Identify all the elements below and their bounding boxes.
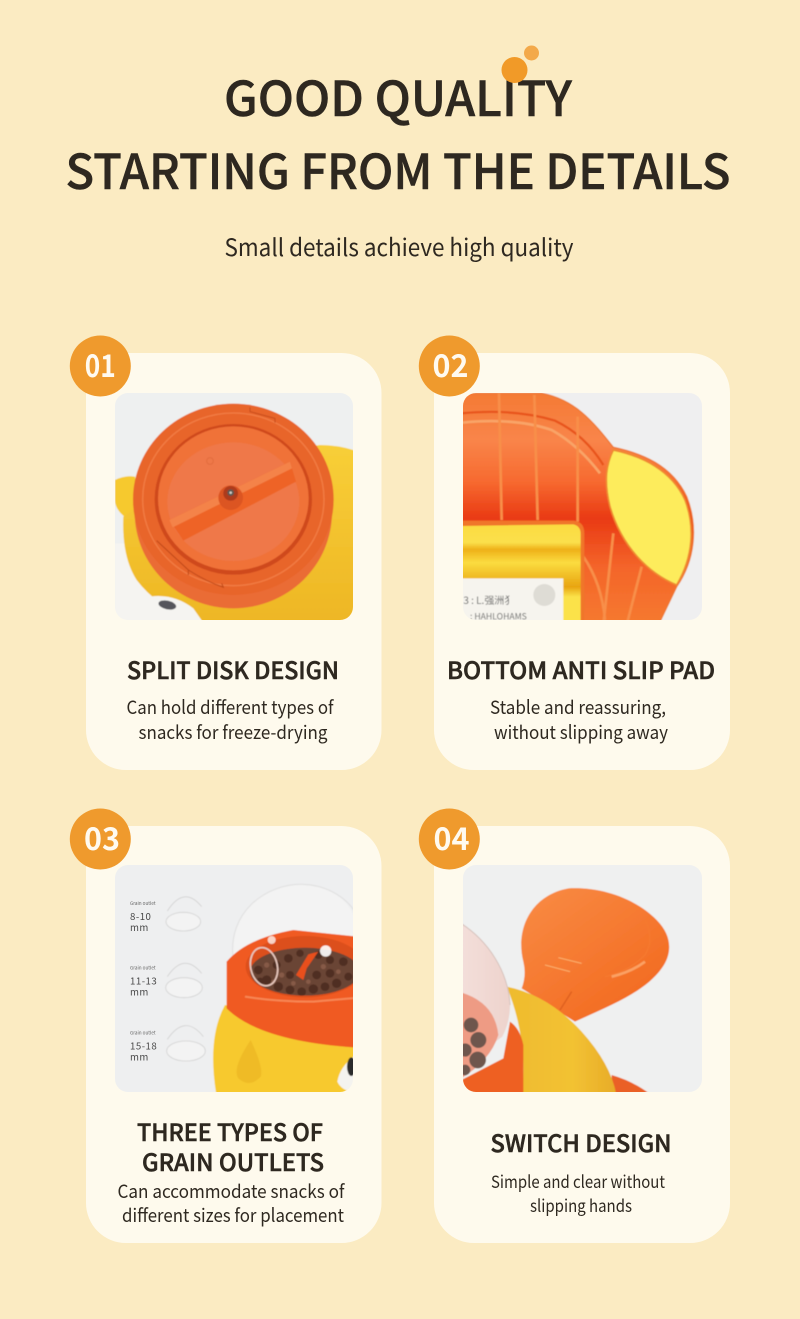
- description: Stable and reassuring,: [490, 694, 666, 720]
- photo: underside with yellow pad: [458, 388, 707, 625]
- description: Simple and clear without: [491, 1168, 666, 1193]
- description: different sizes for placement: [122, 1202, 344, 1228]
- outlet size labels: [130, 900, 157, 1063]
- outlet size labels: 11-13: [130, 974, 157, 988]
- panel: 01 split disk design: [70, 336, 382, 770]
- panel: 03 three types of grain outlets: [70, 808, 382, 1243]
- number badge 04: [419, 808, 480, 870]
- outlet size labels: 8-10: [130, 909, 151, 923]
- outlet size labels: Grain outlet: [130, 900, 156, 907]
- heading: THREE TYPES OF: [137, 1113, 323, 1148]
- heading: BOTTOM ANTI SLIP PAD: [447, 651, 715, 686]
- outlet size labels: Grain outlet: [130, 965, 156, 972]
- photo: orange switch handle: [458, 860, 707, 1097]
- number badge 03: [70, 808, 131, 870]
- decorative orange dots: [502, 46, 539, 83]
- subtitle: Small details achieve high quality: [224, 228, 574, 263]
- photo: underside with yellow pad: : HAHLOHAMS: [470, 610, 527, 622]
- description: without slipping away: [494, 719, 668, 745]
- description: [491, 1168, 666, 1217]
- heading: [137, 1113, 324, 1178]
- description: [490, 694, 668, 745]
- photo: orange split disk lid: [110, 388, 358, 625]
- description: Can accommodate snacks of: [118, 1178, 345, 1204]
- title: STARTING FROM THE DETAILS: [66, 133, 730, 203]
- description: snacks for freeze-drying: [138, 719, 328, 745]
- heading: SWITCH DESIGN: [490, 1124, 672, 1159]
- number badge 02: 02: [432, 341, 468, 386]
- number badge 03: 03: [84, 814, 120, 859]
- title: [66, 60, 730, 203]
- description: Can hold different types of: [126, 694, 334, 720]
- photo: duck feeder background art: [115, 865, 353, 1092]
- outlet size labels: 15-18: [130, 1038, 157, 1052]
- description: [126, 694, 334, 745]
- description: slipping hands: [530, 1192, 632, 1217]
- heading: SPLIT DISK DESIGN: [127, 651, 339, 686]
- description: [118, 1178, 345, 1228]
- panel: 04 switch design: [419, 808, 730, 1243]
- number badge 04: 04: [434, 814, 470, 859]
- title: GOOD QUALITY: [224, 60, 572, 130]
- number badge 01: [70, 336, 131, 396]
- outlet size labels: mm: [130, 1049, 149, 1063]
- number badge 02: [419, 336, 480, 396]
- outlet size labels: Grain outlet: [130, 1029, 156, 1036]
- number badge 01: 01: [85, 341, 116, 386]
- panel: 02 bottom anti slip pad: [419, 336, 730, 770]
- outlet size labels: mm: [130, 985, 149, 999]
- heading: GRAIN OUTLETS: [142, 1143, 324, 1178]
- photo: underside with yellow pad: 3 : L.强洲犭: [463, 592, 514, 607]
- outlet size labels: mm: [130, 920, 149, 934]
